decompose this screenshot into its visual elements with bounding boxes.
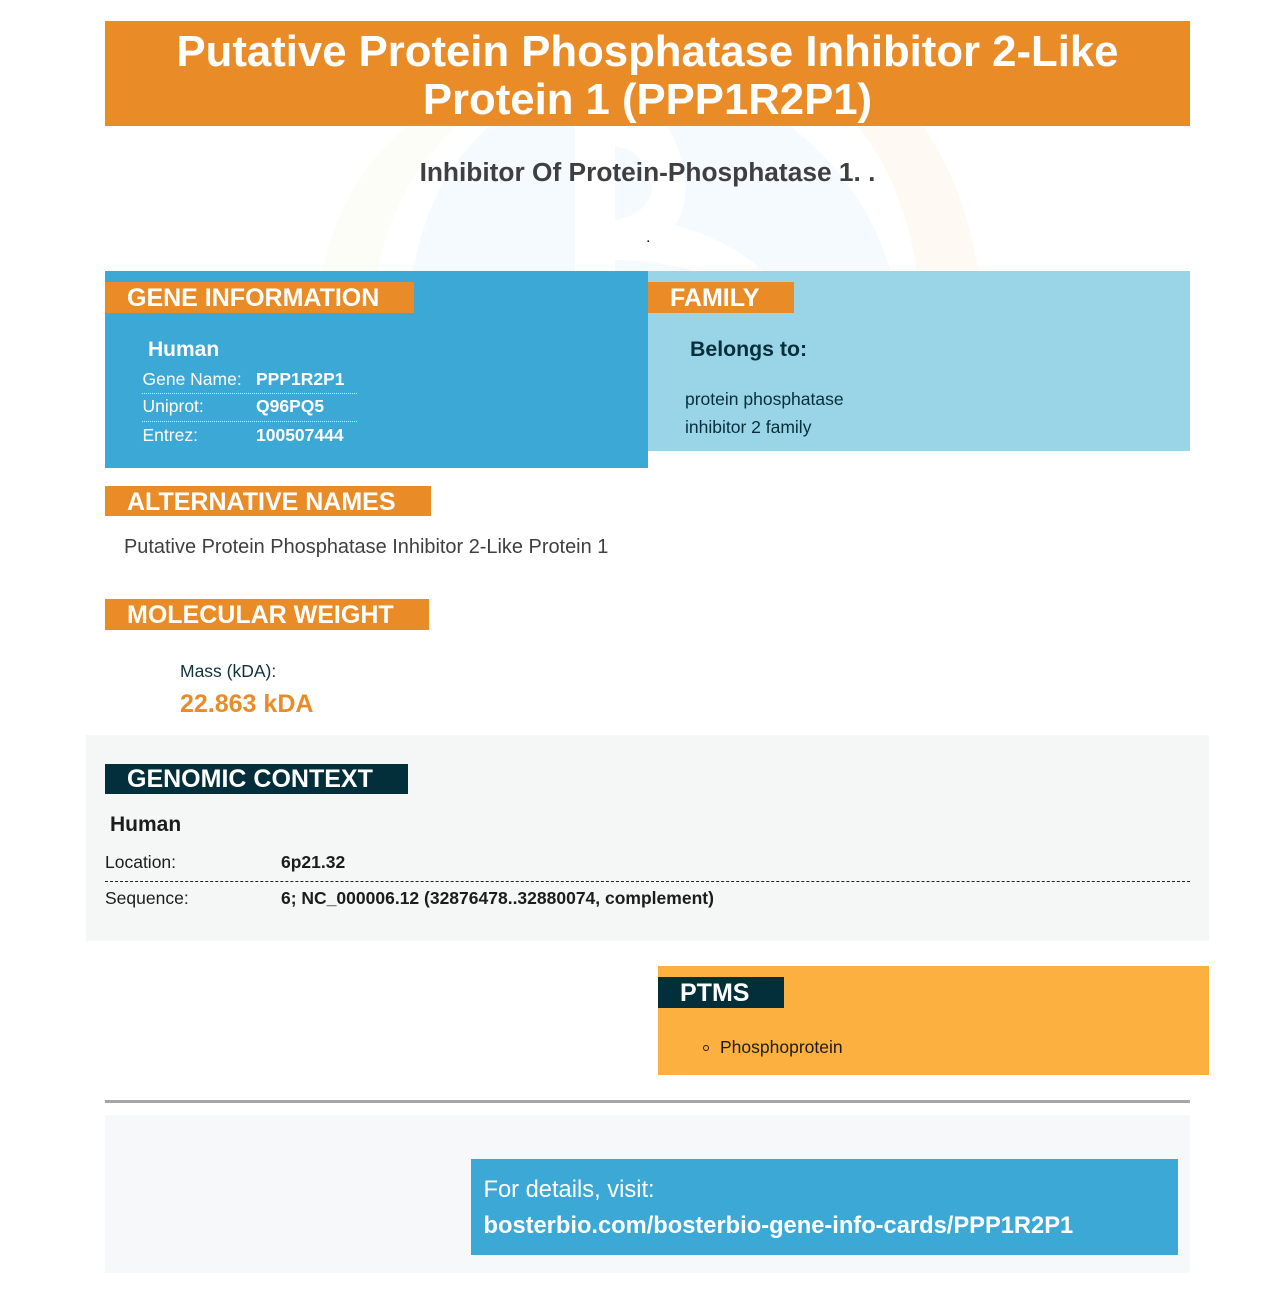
panel: genomic context bbox=[86, 735, 1209, 941]
uniprot row: Q96PQ5 bbox=[256, 396, 324, 416]
gene name row bbox=[142, 369, 357, 394]
divider bbox=[105, 1100, 1190, 1103]
heading: alternative names: ALTERNATIVE NAMES bbox=[127, 488, 396, 516]
species label: Human bbox=[148, 338, 219, 361]
mass label: Mass (kDA): bbox=[180, 661, 276, 681]
list item: Phosphoprotein bbox=[720, 1037, 843, 1057]
dot text: . bbox=[646, 229, 650, 246]
entrez row bbox=[142, 425, 344, 445]
entrez row: 100507444 bbox=[256, 425, 344, 445]
belongs to label: Belongs to: bbox=[690, 337, 807, 361]
list bullet bbox=[703, 1045, 709, 1051]
sequence row: Sequence: bbox=[105, 888, 189, 908]
species label: Human bbox=[110, 813, 181, 836]
url text: bosterbio.com/bosterbio-gene-info-cards/PPP1R2P1 bbox=[484, 1213, 1073, 1239]
heading: ptms bbox=[658, 977, 784, 1008]
alternative names text: Putative Protein Phosphatase Inhibitor 2-Like Protein 1 bbox=[124, 536, 608, 558]
entrez row: Entrez: bbox=[142, 425, 198, 445]
heading: family bbox=[648, 282, 794, 313]
location row: 6p21.32 bbox=[281, 852, 345, 872]
mass value: 22.863 kDA bbox=[180, 690, 313, 718]
panel: footer bbox=[105, 1115, 1190, 1273]
sequence row: 6; NC_000006.12 (32876478..32880074, complement) bbox=[281, 888, 714, 908]
heading: molecular weight: MOLECULAR WEIGHT bbox=[127, 601, 394, 629]
heading: family: FAMILY bbox=[670, 284, 759, 312]
gene name row: Gene Name: bbox=[142, 369, 242, 389]
title banner bbox=[105, 21, 1190, 126]
family description: inhibitor 2 family bbox=[685, 417, 811, 437]
heading: ptms: PTMS bbox=[680, 979, 749, 1007]
panel: gene information bbox=[105, 271, 648, 468]
panel: family bbox=[648, 271, 1190, 451]
title banner: Protein 1 (PPP1R2P1) bbox=[423, 75, 872, 124]
heading: gene information: GENE INFORMATION bbox=[127, 284, 379, 312]
panel: ptms bbox=[658, 966, 1209, 1075]
subtitle: Inhibitor Of Protein-Phosphatase 1. . bbox=[420, 157, 875, 187]
family description: protein phosphatase bbox=[685, 389, 844, 409]
gene name row: PPP1R2P1 bbox=[256, 369, 345, 389]
uniprot row: Uniprot: bbox=[142, 396, 204, 416]
heading: genomic context: GENOMIC CONTEXT bbox=[127, 765, 373, 793]
family description bbox=[685, 389, 844, 437]
title banner: Putative Protein Phosphatase Inhibitor 2-Like bbox=[177, 27, 1118, 76]
uniprot row bbox=[142, 396, 357, 422]
watermark logo bbox=[413, 126, 978, 271]
callout: details link bbox=[471, 1159, 1178, 1255]
location row: Location: bbox=[105, 852, 176, 872]
visit text: For details, visit: bbox=[484, 1177, 655, 1203]
location row bbox=[105, 851, 1190, 882]
